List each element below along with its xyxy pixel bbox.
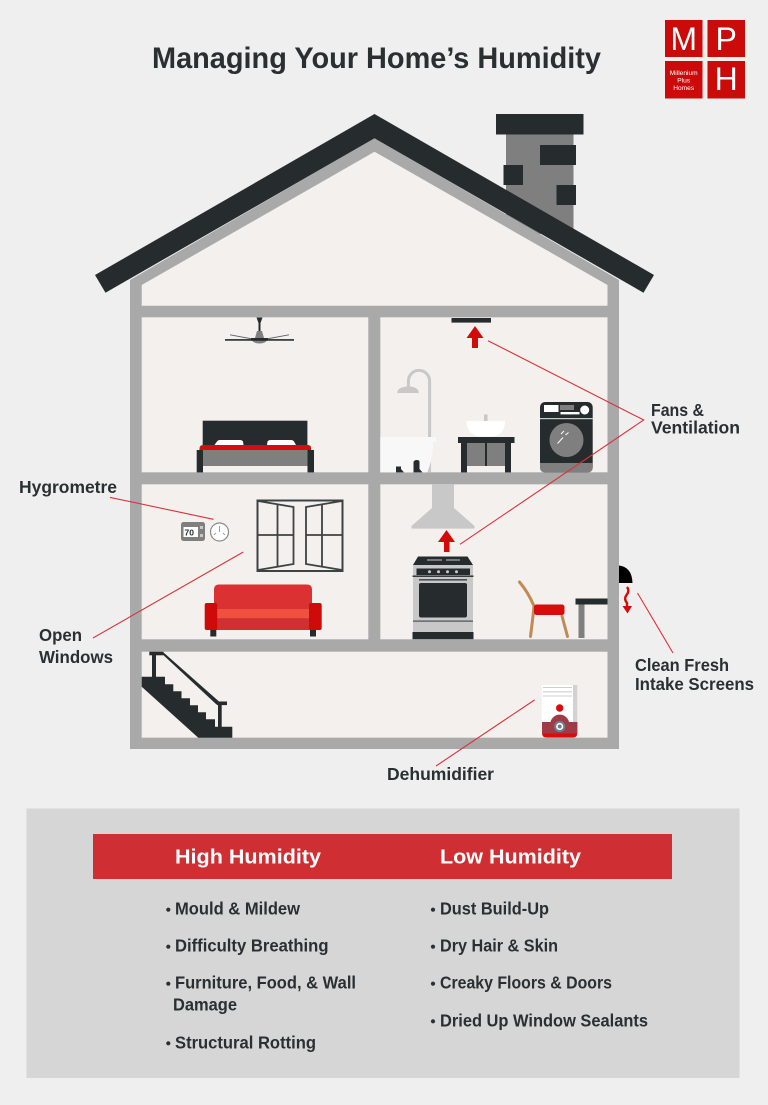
attic room [142, 152, 607, 306]
list: low humidity effects [431, 899, 648, 1030]
list: low humidity effects: Dry Hair & Skin [440, 936, 558, 956]
arrow: bathroom vent airflow [466, 326, 484, 348]
logo: MPH: H [715, 61, 738, 97]
label: dehumidifier: Dehumidifier [387, 764, 494, 784]
logo: MPH [665, 20, 745, 98]
heading: low humidity: Low Humidity [440, 846, 582, 868]
logo: MPH: Plus [677, 78, 691, 84]
logo: MPH: P [716, 21, 737, 57]
icon: table [576, 598, 608, 638]
arrow: intake airflow [622, 587, 632, 614]
roof [95, 114, 654, 293]
list: high humidity effects: Difficulty Breathing [175, 936, 328, 956]
logo: MPH: Millenium [670, 70, 698, 77]
list: low humidity effects: Dust Build-Up [440, 899, 549, 919]
label: fans and ventilation: Fans & [651, 400, 704, 420]
label: fans and ventilation [651, 400, 740, 438]
logo: MPH: M [670, 21, 697, 57]
list: high humidity effects: Furniture, Food, & Wall [175, 973, 356, 993]
house walls [130, 138, 619, 749]
basement [142, 652, 607, 738]
title: Managing Your Home’s Humidity [152, 42, 602, 75]
list: low humidity effects: Dried Up Window Sealants [440, 1010, 648, 1030]
logo: MPH: Homes [673, 85, 695, 92]
icon: ceiling fan [225, 318, 294, 344]
icon: bed [197, 421, 314, 472]
label: open windows: Open [39, 625, 82, 645]
icon: stove [412, 556, 474, 639]
callout lines [93, 341, 673, 766]
icon: shower and bathtub [380, 370, 436, 472]
icon: window [258, 500, 342, 571]
kitchen [380, 484, 608, 639]
list: low humidity effects: Creaky Floors & Doors [440, 973, 612, 993]
bedroom [142, 317, 368, 472]
bathroom and laundry room [380, 317, 608, 472]
icon: ceiling vent [452, 318, 491, 323]
icon: washing machine [540, 402, 593, 472]
label: clean fresh intake screens: Clean Fresh [635, 655, 729, 675]
icon: staircase [142, 652, 232, 738]
list: high humidity effects: Structural Rotting [175, 1032, 316, 1052]
label: open windows: Windows [39, 647, 113, 667]
icon: range hood [412, 484, 474, 529]
icon: chair [520, 582, 568, 636]
icon: hygrometer: 70 [184, 528, 194, 538]
arrow: stove airflow [438, 530, 455, 552]
icon: dehumidifier [542, 685, 577, 738]
living room [142, 484, 368, 639]
chimney [496, 114, 584, 234]
label: clean fresh intake screens: Intake Screens [635, 674, 754, 694]
icon: sofa [205, 584, 322, 636]
label: hygrometre: Hygrometre [19, 477, 117, 497]
heading: high humidity: High Humidity [175, 846, 322, 868]
list: high humidity effects: Mould & Mildew [175, 899, 300, 919]
icon: sink vanity [458, 414, 514, 472]
label: open windows [39, 625, 113, 667]
header bar [93, 834, 672, 879]
house structure [95, 114, 654, 749]
label: clean fresh intake screens [635, 655, 754, 694]
list: high humidity effects [166, 899, 356, 1052]
icon: air intake hood [619, 566, 632, 583]
label: fans and ventilation: Ventilation [651, 418, 740, 438]
list: high humidity effects: Damage [173, 995, 237, 1015]
panel: humidity effects [26, 808, 740, 1078]
icon: hygrometer [181, 522, 228, 541]
